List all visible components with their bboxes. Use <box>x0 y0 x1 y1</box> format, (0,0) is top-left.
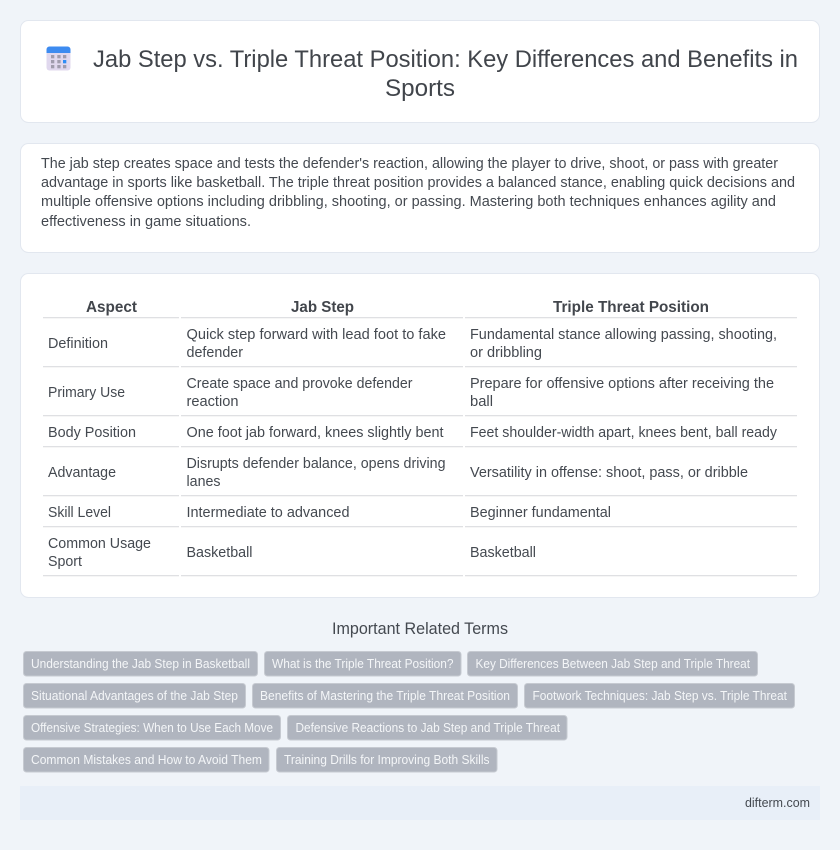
table row: primary use: Create space and provoke defender <box>186 375 413 392</box>
table row: skill level <box>48 504 611 521</box>
title: Sports <box>385 75 455 102</box>
table row: common usage sport: Basketball <box>470 544 536 561</box>
text block: introduction <box>41 155 795 230</box>
table row: common usage sport: Basketball <box>186 544 252 561</box>
table row: primary use: Primary Use <box>48 384 125 401</box>
table row: advantage <box>48 455 748 490</box>
table row: definition: defender <box>186 344 243 361</box>
panel: comparison table <box>20 274 820 598</box>
table row: advantage: Advantage <box>48 464 116 481</box>
table row: advantage: Disrupts defender balance, opens driving <box>186 455 446 472</box>
table row: common usage sport: Sport <box>48 553 83 570</box>
table header row: Aspect <box>86 299 138 316</box>
text block: introduction: effectiveness in game situations. <box>41 213 251 230</box>
table row: skill level: Skill Level <box>48 504 111 521</box>
tags: related terms: Training Drills for Improving Both Skills <box>284 753 490 767</box>
table row: definition <box>48 326 777 361</box>
table header row <box>86 299 709 316</box>
table header row: Triple Threat Position <box>553 299 709 316</box>
table row: primary use: ball <box>470 393 493 410</box>
footer: difterm.com <box>745 795 810 810</box>
tags: related terms: Defensive Reactions to Jab Step and Triple Threat <box>296 721 560 735</box>
tags: related terms: What is the Triple Threat Position? <box>272 657 454 671</box>
tags: related terms: Understanding the Jab Step in Basketball <box>31 657 250 671</box>
table row: skill level: Intermediate to advanced <box>186 504 350 521</box>
table row: common usage sport <box>48 535 536 570</box>
tags: related terms: Benefits of Mastering the Triple Threat Position <box>260 689 510 703</box>
title <box>93 46 798 102</box>
table row: definition: or dribbling <box>470 344 542 361</box>
title: Jab Step vs. Triple Threat Position: Key Differences and Benefits in <box>93 46 798 73</box>
table row: definition: Quick step forward with lead foot to fake <box>186 326 446 343</box>
icon: calendar <box>46 46 70 70</box>
table header row: Jab Step <box>291 299 354 316</box>
text block: introduction: The jab step creates space and tests the defender's reaction, allowing the player to drive, shoot, or pass with greater <box>41 155 778 172</box>
table row: primary use: reaction <box>186 393 238 410</box>
table row: body position: Feet shoulder-width apart, knees bent, ball ready <box>470 424 777 441</box>
panel: title card <box>20 20 820 122</box>
table row: advantage: lanes <box>186 473 220 490</box>
heading: important related terms: Important Related Terms <box>332 620 508 638</box>
tags: related terms: Key Differences Between Jab Step and Triple Threat <box>476 657 750 671</box>
table row: primary use <box>48 375 774 410</box>
panel: introduction text <box>20 144 820 252</box>
table row: body position <box>48 424 777 441</box>
tags: related terms: Offensive Strategies: When to Use Each Move <box>31 721 273 735</box>
table row: body position: Body Position <box>48 424 136 441</box>
text block: introduction: multiple offensive options including dribbling, shooting, or passing. Mastering both techniques enhances agility and <box>41 193 776 210</box>
tags: related terms: Footwork Techniques: Jab Step vs. Triple Threat <box>532 689 787 703</box>
table row: skill level: Beginner fundamental <box>470 504 611 521</box>
table row: advantage: Versatility in offense: shoot, pass, or dribble <box>470 464 748 481</box>
table row: definition: Definition <box>48 335 108 352</box>
table row: common usage sport: Common Usage <box>48 535 151 552</box>
text block: introduction: advantage in sports like basketball. The triple threat position provides a balanced stance, enabling quick decisions and <box>41 174 795 191</box>
tags: related terms: Situational Advantages of the Jab Step <box>31 689 238 703</box>
table row: definition: Fundamental stance allowing passing, shooting, <box>470 326 777 343</box>
table row: primary use: Prepare for offensive options after receiving the <box>470 375 774 392</box>
table row: body position: One foot jab forward, knees slightly bent <box>186 424 444 441</box>
tags: related terms <box>24 652 794 772</box>
footer <box>20 786 820 820</box>
tags: related terms: Common Mistakes and How to Avoid Them <box>31 753 262 767</box>
